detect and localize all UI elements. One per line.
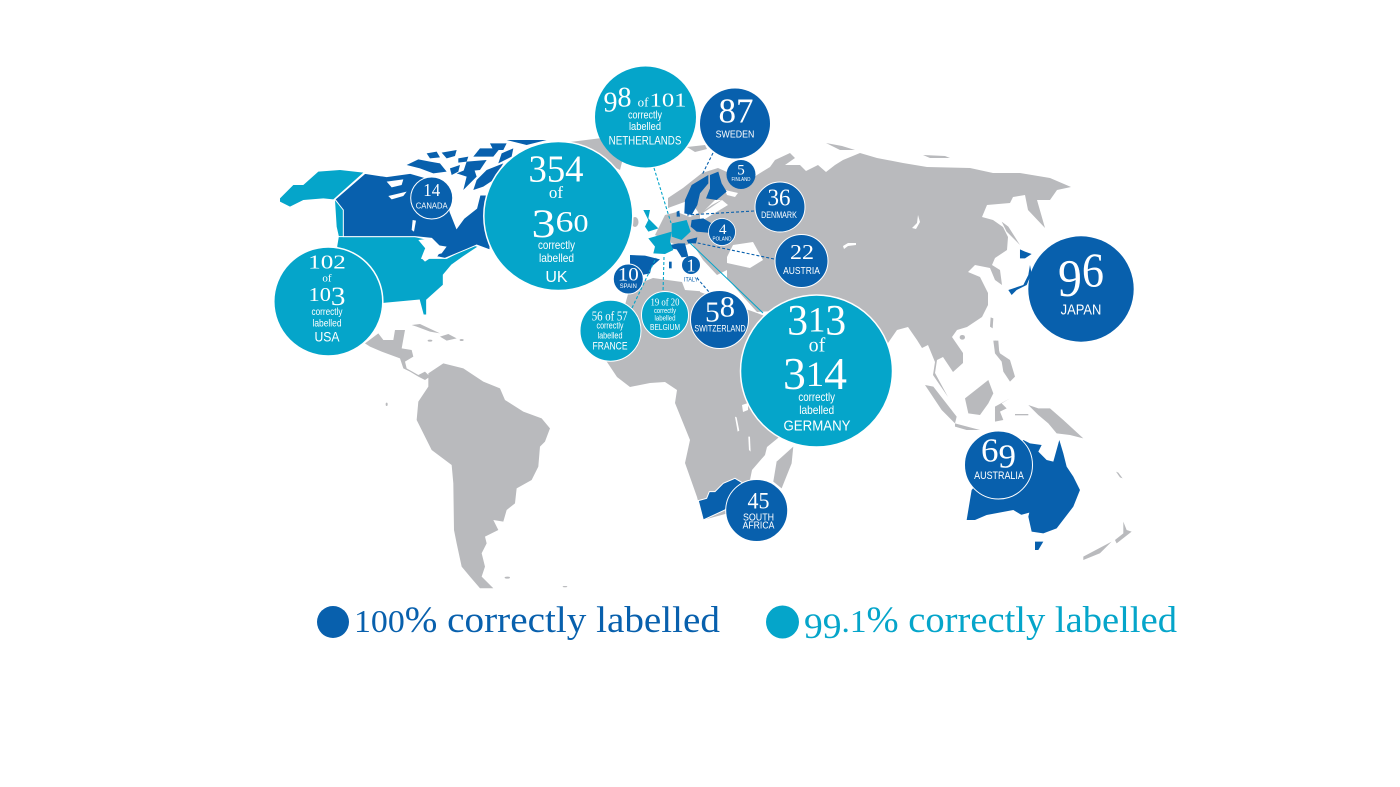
land: grey countries [365, 137, 1132, 588]
bubble: Poland: POLAND [712, 236, 732, 242]
bubble: USA [274, 247, 383, 356]
bubble: Switzerland: 5 [705, 297, 720, 329]
bubble: Germany: labelled [799, 403, 834, 417]
bubble: Australia: 9 [998, 439, 1016, 476]
bubble: USA: of [322, 273, 332, 285]
bubble: France: labelled [598, 330, 622, 340]
bubble: Spain: 10 [618, 265, 639, 286]
bubble: Finland: 5 [737, 162, 745, 178]
country: Alaska and USA [280, 170, 478, 315]
bubble: Germany: 3 [825, 297, 846, 344]
bubble: Switzerland [690, 290, 748, 348]
bubble: South Africa [726, 480, 788, 542]
countries: Europe, 99.1% group [643, 210, 691, 254]
bubble: Japan: JAPAN [1061, 301, 1101, 318]
bubble: UK: of [549, 183, 563, 202]
bubble: Germany: GERMANY [784, 418, 850, 435]
bubble: Germany: of [809, 335, 826, 357]
bubble: UK: UK [545, 269, 568, 286]
countries: Europe, 100% group [630, 172, 727, 275]
bubble: Poland [708, 218, 736, 246]
bubble: Belgium: BELGIUM [650, 323, 680, 332]
bubble: Sweden: 87 [718, 92, 754, 131]
bubble: Netherlands: NETHERLANDS [609, 133, 681, 147]
country: Canada [335, 140, 547, 262]
bubble: Austria: 22 [790, 240, 814, 264]
bubble: Sweden: SWEDEN [716, 130, 754, 141]
bubble: Germany: 3 [787, 297, 808, 344]
bubble: UK: correctly [538, 238, 575, 252]
bubble: Italy: ITALY [684, 278, 698, 284]
bubble: USA: 10 [308, 284, 328, 306]
bubble: Netherlands: correctly [628, 109, 662, 121]
bubble: South Africa: AFRICA [743, 520, 774, 532]
bubble: Germany [740, 295, 892, 447]
bubble: Austria [775, 234, 828, 288]
bubble: South Africa: 45 [748, 488, 770, 513]
bubble: Sweden [700, 88, 770, 158]
country: South Africa [698, 478, 743, 520]
bubble: Poland: 4 [719, 222, 727, 238]
bubble: UK: 354 [528, 149, 584, 191]
bubble: Japan [1028, 236, 1134, 342]
bubble: Denmark: DENMARK [761, 210, 797, 220]
bubble: USA: labelled [312, 319, 342, 330]
bubble: Australia: AUSTRALIA [974, 470, 1024, 482]
bubble: France: correctly [596, 321, 624, 331]
bubble: Switzerland: 8 [720, 291, 735, 324]
legend item: 99.1% correctly labelled: % correctly labelled [867, 600, 1164, 641]
bubble: USA: correctly [312, 307, 342, 318]
country: Japan [1008, 249, 1032, 295]
bubble: UK: 0 [574, 211, 588, 238]
bubble: France [580, 300, 641, 361]
bubble: Germany: 1 [808, 299, 825, 339]
bubble: South Africa: SOUTH [743, 511, 774, 523]
legend item: 100% correctly labelled: 100% correctly labelled [354, 600, 721, 641]
bubble: France: FRANCE [592, 340, 628, 352]
bubble: Italy: 1 [686, 256, 696, 276]
bubble: USA: 102 [308, 251, 346, 273]
legend item: 99.1% correctly labelled: 99 [804, 606, 842, 646]
bubble: Australia [964, 431, 1032, 499]
bubble: Denmark: 36 [768, 186, 790, 212]
bubble: Netherlands: labelled [629, 121, 661, 133]
bubble: Canada [411, 177, 453, 219]
bubble: Netherlands: 8 [618, 83, 632, 114]
bubble: Germany: 1 [806, 354, 824, 394]
bubble: Japan: 9 [1058, 250, 1082, 308]
seas and lakes [700, 190, 920, 452]
bubble: Austria: AUSTRIA [783, 266, 820, 277]
bubble: Netherlands: 9 [604, 88, 618, 119]
bubble: Netherlands: 101 [650, 90, 686, 112]
bubble: UK: 3 [532, 201, 556, 246]
bubble: France: 56 of 57 [592, 310, 628, 325]
bubble: UK: labelled [539, 251, 574, 265]
bubble: Canada: 14 [423, 180, 440, 200]
bubble: Belgium [642, 292, 688, 338]
bubble: Japan: 6 [1082, 243, 1104, 298]
bubble: Spain [613, 264, 643, 294]
legend item: 99.1% correctly labelled: .1 [842, 603, 867, 639]
world map [280, 137, 1132, 588]
bubble: USA: 3 [331, 282, 346, 311]
bubble: Italy [682, 256, 700, 284]
bubble: UK [484, 142, 633, 290]
bubble: Belgium: 19 of 20 [650, 297, 680, 309]
leader lines [632, 153, 774, 313]
bubble: Spain: SPAIN [620, 283, 637, 290]
legend item: 99.1% correctly labelled [766, 600, 1178, 646]
bubble: Germany: correctly [798, 390, 835, 404]
bubble: Denmark [755, 182, 805, 232]
country: Australia [967, 440, 1080, 550]
bubble: Germany: 4 [824, 349, 847, 399]
bubble: Belgium: correctly [654, 308, 676, 315]
bubble: Switzerland: SWITZERLAND [694, 323, 746, 333]
bubble: USA: USA [314, 329, 340, 345]
bubble: Netherlands [595, 66, 696, 168]
bubble: Netherlands: of [638, 95, 649, 110]
bubble: Australia: 6 [981, 433, 998, 470]
legend [317, 600, 1178, 646]
bubble: Belgium: labelled [654, 316, 676, 323]
bubble: Germany: 3 [783, 349, 806, 399]
bubble: Finland: FINLAND [732, 177, 751, 183]
bubble: Canada: CANADA [416, 201, 448, 211]
bubble: UK: 6 [556, 206, 574, 239]
bubble: Finland [726, 160, 756, 189]
